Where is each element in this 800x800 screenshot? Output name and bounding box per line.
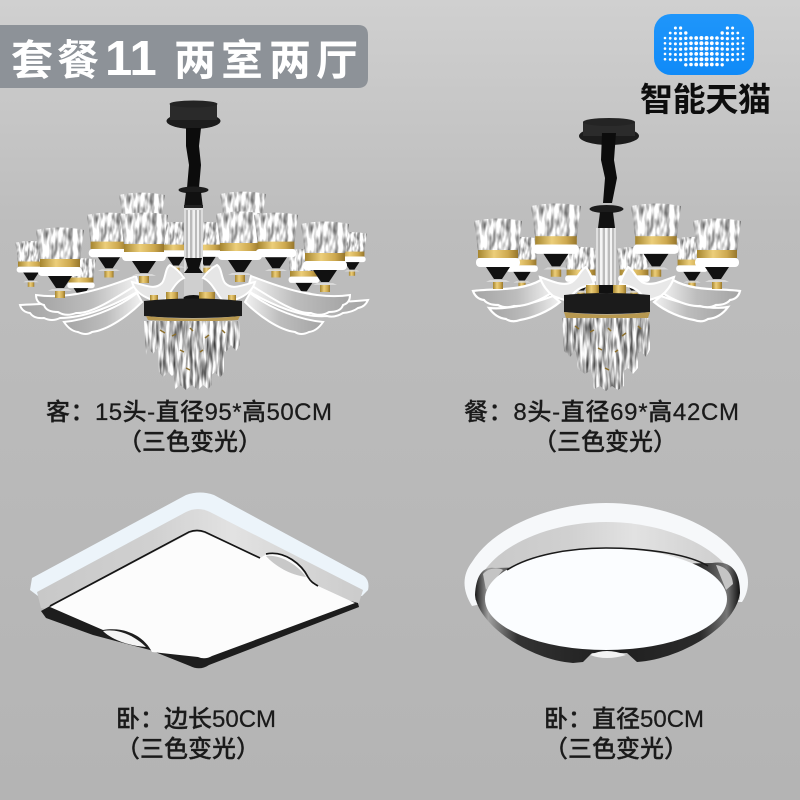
left wing arms (20, 265, 184, 334)
bottom notch highlight (590, 651, 626, 658)
notch highlight: lower left (103, 630, 146, 647)
caption: bedroom square: （三色变光） (116, 736, 260, 763)
caption: bedroom square: 卧：边长50CM (116, 706, 276, 733)
black drum with gold collars (144, 292, 242, 322)
title banner: 套餐 (11, 37, 99, 84)
hanging crystal tiers (144, 321, 240, 390)
caption: bedroom round (544, 706, 704, 763)
left wing arms (473, 267, 594, 321)
black lower ring (475, 562, 740, 663)
notch highlight: upper right (266, 556, 306, 577)
canopy and chain (166, 100, 220, 209)
dark top edge of panel (50, 530, 318, 606)
glass column (184, 208, 204, 301)
icon: Tmall dotted cat head (654, 14, 754, 75)
caption: bedroom round: （三色变光） (544, 736, 688, 763)
grey side band (37, 509, 363, 640)
caption: bedroom square (116, 706, 276, 763)
glowing white ring (464, 503, 748, 606)
hanging crystal tiers (562, 318, 650, 391)
glass column (596, 228, 616, 293)
chandelier: dining room, 8 heads (473, 118, 741, 391)
rear crystal shades (15, 192, 367, 302)
front crystal shades (474, 203, 741, 289)
right wing arms (203, 265, 368, 334)
caption: dining room (464, 399, 739, 456)
front crystal shades (36, 212, 349, 298)
caption: living room: （三色变光） (118, 429, 262, 456)
dark top edge of panel (507, 548, 708, 570)
ceiling lamp: round (464, 503, 748, 663)
black drum with gold collars (564, 285, 650, 319)
black lower rim (41, 560, 359, 668)
glowing white frame (30, 492, 368, 596)
title banner (0, 25, 368, 88)
caption: bedroom round: 卧：直径50CM (544, 706, 704, 733)
logo: smart Tmall (640, 14, 771, 118)
canopy and chain (579, 118, 639, 228)
caption: dining room: 餐：8头-直径69*高42CM (464, 399, 739, 426)
white light panel (485, 548, 727, 650)
white light panel (50, 532, 355, 658)
rear crystal shades (505, 237, 709, 298)
grey side band (475, 522, 740, 620)
ceiling lamp: square (30, 492, 368, 668)
caption: living room (46, 399, 332, 456)
title banner: 11 (105, 32, 157, 86)
left notch crescent (483, 568, 503, 590)
right notch crescent (716, 565, 733, 590)
title banner: 两室两厅 (174, 37, 358, 84)
right wing arms (620, 267, 740, 321)
caption: living room: 客：15头-直径95*高50CM (46, 399, 332, 426)
chandelier: living room, 15 heads (15, 100, 368, 390)
logo text: 智能天猫 (640, 81, 771, 118)
caption: dining room: （三色变光） (533, 429, 677, 456)
